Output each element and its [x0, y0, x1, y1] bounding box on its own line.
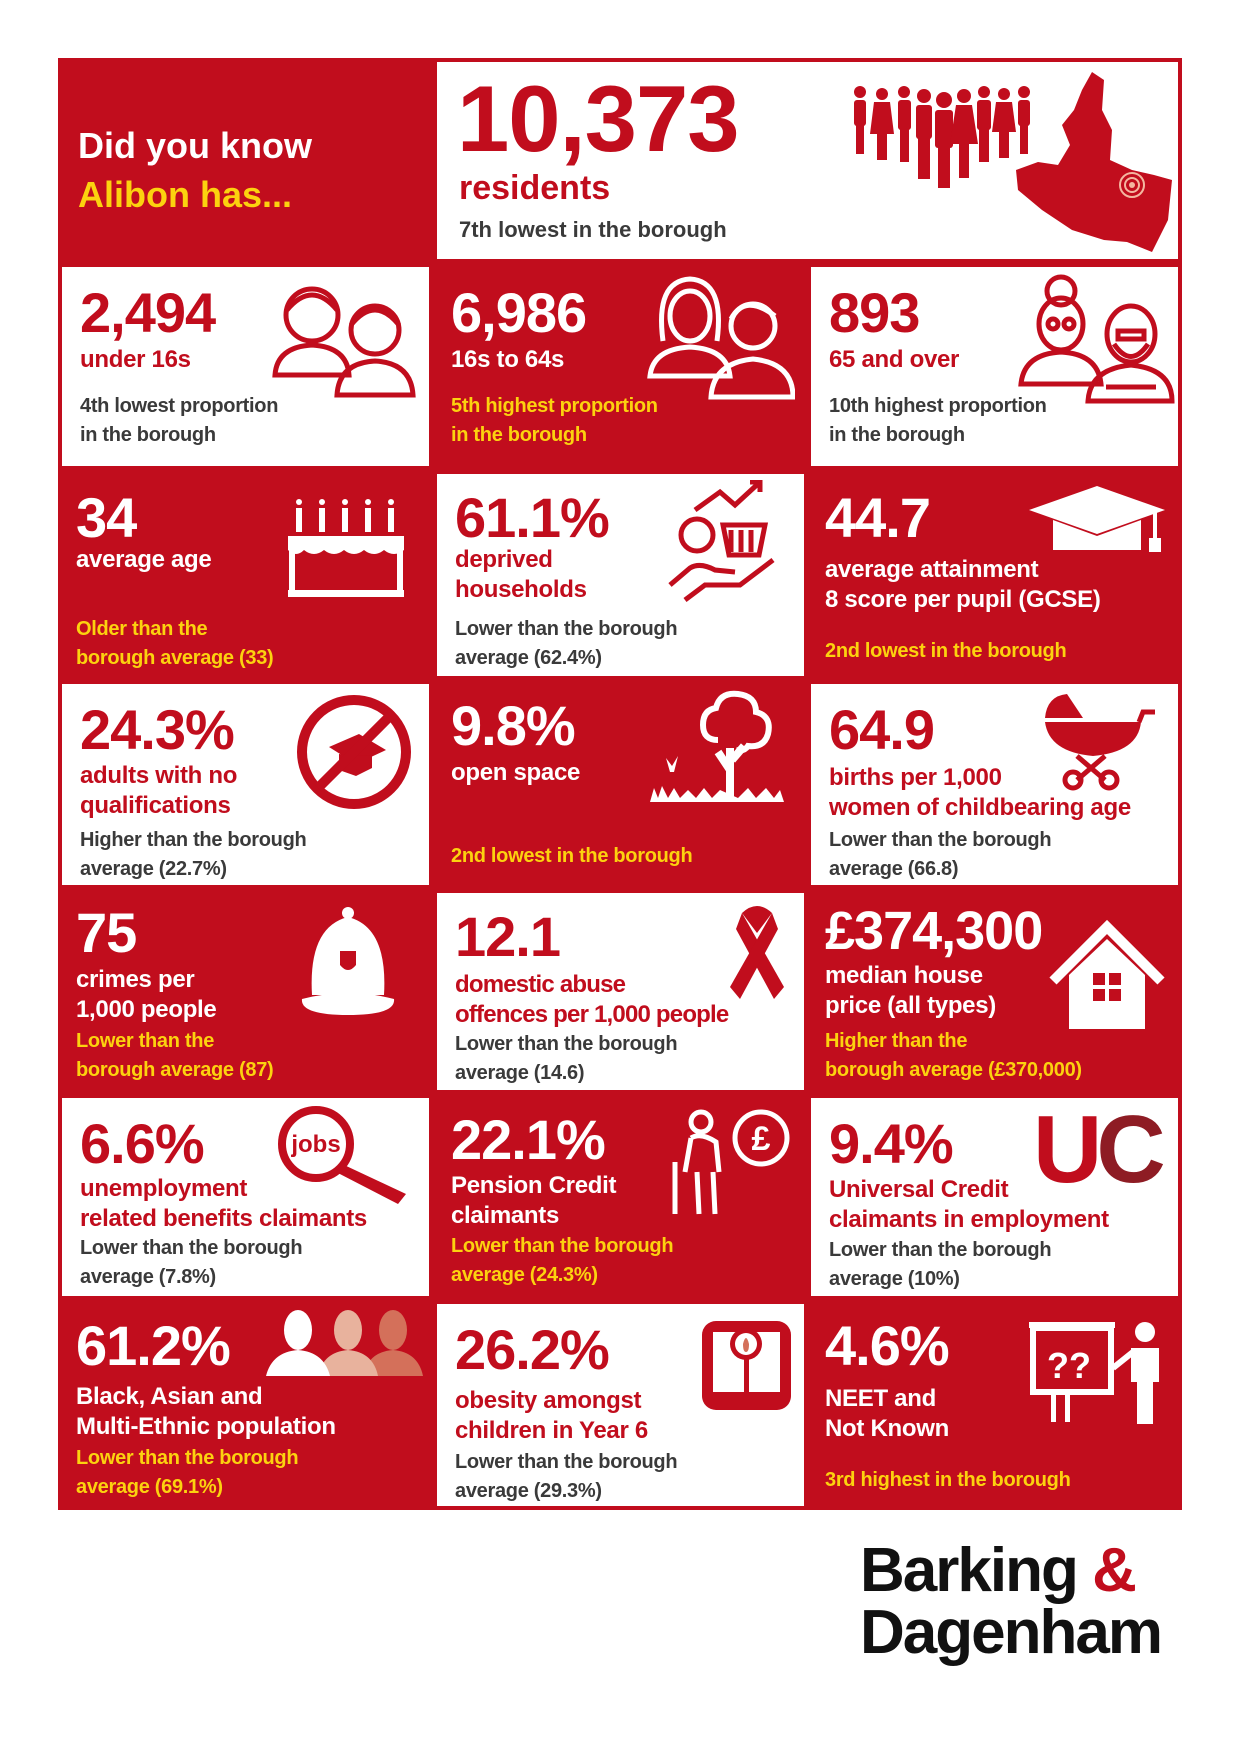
icon: police helmet [302, 907, 394, 1015]
icon: pensioner with pound [672, 1110, 790, 1214]
label: Multi-Ethnic population [76, 1413, 336, 1440]
description: Higher than the [825, 1030, 967, 1052]
description [829, 395, 1047, 446]
number: 26.2% [455, 1318, 609, 1381]
panel: universal credit [807, 1094, 1182, 1300]
label: households [455, 576, 587, 603]
description [76, 1030, 273, 1081]
panel: house price [807, 889, 1182, 1094]
panel: ethnic population [58, 1300, 433, 1510]
icon: awareness ribbon [730, 906, 784, 999]
label: obesity amongst [455, 1387, 641, 1414]
description [80, 829, 306, 880]
icon: hand with basket [668, 480, 774, 602]
description: Lower than the borough [829, 829, 1051, 851]
icon: pensioner with pound: £ [752, 1120, 771, 1158]
description: in the borough [451, 424, 587, 446]
description: average (29.3%) [455, 1480, 602, 1502]
icon: presentation board: ?? [1047, 1345, 1091, 1386]
label: Not Known [825, 1415, 949, 1442]
label: NEET and [825, 1385, 936, 1412]
label: median house [825, 962, 983, 989]
description [455, 1448, 677, 1506]
description: 4th lowest proportion [80, 395, 278, 417]
number: 61.2% [76, 1314, 230, 1377]
description: average (10%) [829, 1268, 960, 1290]
description: average (14.6) [455, 1062, 584, 1084]
number: 6.6% [80, 1112, 204, 1175]
label [76, 966, 216, 1023]
description: 2nd lowest in the borough [825, 640, 1066, 662]
icon: jobs magnifier: jobs [290, 1131, 341, 1158]
label: adults with no [80, 762, 237, 789]
description: Lower than the [76, 1030, 214, 1052]
number: 44.7 [825, 486, 930, 549]
label: open space [451, 759, 580, 786]
description: Lower than the borough [455, 618, 677, 640]
number: 24.3% [80, 698, 234, 761]
description: in the borough [829, 424, 965, 446]
label [825, 556, 1101, 613]
label: women of childbearing age [829, 794, 1131, 821]
icon: pram [1045, 694, 1155, 790]
icon: presentation board [1027, 1320, 1167, 1425]
title text [78, 125, 312, 215]
panel: title [58, 58, 433, 263]
icon: UC letters: UC [1033, 1096, 1160, 1203]
icon: older couple [1018, 274, 1174, 404]
description: Lower than the borough [455, 1033, 677, 1055]
panel: crimes [58, 889, 433, 1094]
panel: pension credit [433, 1094, 808, 1300]
description [455, 618, 677, 669]
title text: Did you know [78, 125, 312, 166]
icon: house [1050, 920, 1164, 1029]
label [80, 762, 237, 819]
description: borough average (87) [76, 1059, 273, 1081]
label: children in Year 6 [455, 1417, 648, 1444]
number: 2,494 [80, 281, 215, 344]
description: average (66.8) [829, 858, 958, 880]
icon: weighing scale [699, 1318, 794, 1413]
label: 65 and over [829, 346, 959, 373]
label: unemployment [80, 1175, 247, 1202]
description: average (7.8%) [80, 1266, 216, 1288]
label: 8 score per pupil (GCSE) [825, 586, 1101, 613]
label: crimes per [76, 966, 194, 993]
number: 22.1% [451, 1108, 605, 1171]
label: average attainment [825, 556, 1038, 583]
number: 34 [76, 486, 136, 549]
logo: Barking & Dagenham: Dagenham [860, 1598, 1161, 1667]
number: 9.4% [829, 1112, 953, 1175]
icon: borough map [1016, 72, 1172, 252]
description [76, 618, 273, 669]
label [76, 1382, 336, 1442]
label: claimants in employment [829, 1206, 1109, 1233]
panel: NEET [807, 1300, 1182, 1510]
description [80, 1237, 302, 1288]
label: under 16s [80, 346, 191, 373]
icon: no graduation [297, 695, 411, 809]
label: deprived [455, 546, 553, 573]
description: average (24.3%) [451, 1264, 598, 1286]
panel: 65 and over [807, 263, 1182, 470]
description: Older than the [76, 618, 207, 640]
label: offences per 1,000 people [455, 1001, 728, 1028]
panel: open space [433, 680, 808, 889]
title text: Alibon has... [78, 174, 292, 215]
residents rank: 7th lowest in the borough [459, 217, 727, 242]
panel: average age [58, 470, 433, 680]
description: Lower than the borough [829, 1239, 1051, 1261]
label [455, 546, 587, 603]
description: borough average (£370,000) [825, 1059, 1082, 1081]
icon: tree [650, 690, 784, 802]
logo: Barking & Dagenham [860, 1540, 1190, 1670]
label [825, 1384, 949, 1444]
label [455, 971, 728, 1028]
label [80, 1175, 367, 1232]
number: £374,300 [825, 901, 1042, 961]
number: 64.9 [829, 698, 934, 761]
label [825, 962, 996, 1019]
description [451, 1235, 673, 1286]
icon: people crowd [854, 86, 1030, 188]
number: 75 [76, 901, 136, 964]
label: Black, Asian and [76, 1383, 262, 1410]
label: 1,000 people [76, 996, 216, 1023]
description: average (22.7%) [80, 858, 227, 880]
panel: deprived households [433, 470, 808, 680]
number: 6,986 [451, 281, 586, 344]
label: 16s to 64s [451, 346, 564, 373]
label: Universal Credit [829, 1176, 1008, 1203]
description: 5th highest proportion [451, 395, 658, 417]
number: 9.8% [451, 694, 575, 757]
description: Lower than the borough [455, 1451, 677, 1473]
label: claimants [451, 1202, 559, 1229]
number: 893 [829, 281, 919, 344]
label [451, 1172, 616, 1229]
description: Lower than the borough [451, 1235, 673, 1257]
panel: no qualifications [58, 680, 433, 889]
description: average (62.4%) [455, 647, 602, 669]
panel: under 16s [58, 263, 433, 470]
logo: Barking & Dagenham: Barking & [860, 1536, 1135, 1605]
icon: children [272, 286, 416, 398]
label: related benefits claimants [80, 1205, 367, 1232]
description [829, 1239, 1051, 1290]
label: Pension Credit [451, 1172, 616, 1199]
panel: births [807, 680, 1182, 889]
description: Lower than the borough [80, 1237, 302, 1259]
label [829, 764, 1131, 821]
label: domestic abuse [455, 971, 625, 998]
description: 3rd highest in the borough [825, 1469, 1071, 1491]
label: births per 1,000 [829, 764, 1002, 791]
panel: 16s to 64s [433, 263, 808, 470]
description: in the borough [80, 424, 216, 446]
panel: obesity [433, 1300, 808, 1510]
icon: three silhouettes [258, 1308, 423, 1376]
description [455, 1033, 677, 1084]
icon: jobs magnifier [278, 1106, 406, 1204]
icon: birthday cake [288, 499, 404, 597]
description [80, 395, 278, 446]
description: Lower than the borough [76, 1447, 298, 1469]
label [455, 1386, 648, 1446]
panel: unemployment [58, 1094, 433, 1300]
description: Higher than the borough [80, 829, 306, 851]
label: average age [76, 546, 211, 573]
description [829, 829, 1051, 880]
description: borough average (33) [76, 647, 273, 669]
number: 12.1 [455, 905, 560, 968]
description [76, 1444, 298, 1502]
main grid panel [58, 58, 1182, 1510]
description [451, 395, 658, 446]
icon: graduation cap [1029, 486, 1165, 552]
icon: adults [647, 276, 795, 400]
panel: domestic abuse [433, 889, 808, 1094]
panel: attainment [807, 470, 1182, 680]
description [825, 1030, 1082, 1081]
label: qualifications [80, 792, 230, 819]
residents label: residents [459, 169, 610, 207]
description: average (69.1%) [76, 1476, 223, 1498]
panel: residents [433, 58, 1182, 263]
number: 61.1% [455, 486, 609, 549]
number: 4.6% [825, 1314, 949, 1377]
residents number: 10,373 [457, 66, 739, 171]
description: 10th highest proportion [829, 395, 1047, 417]
label [829, 1176, 1109, 1233]
label: price (all types) [825, 992, 996, 1019]
description: 2nd lowest in the borough [451, 845, 692, 867]
